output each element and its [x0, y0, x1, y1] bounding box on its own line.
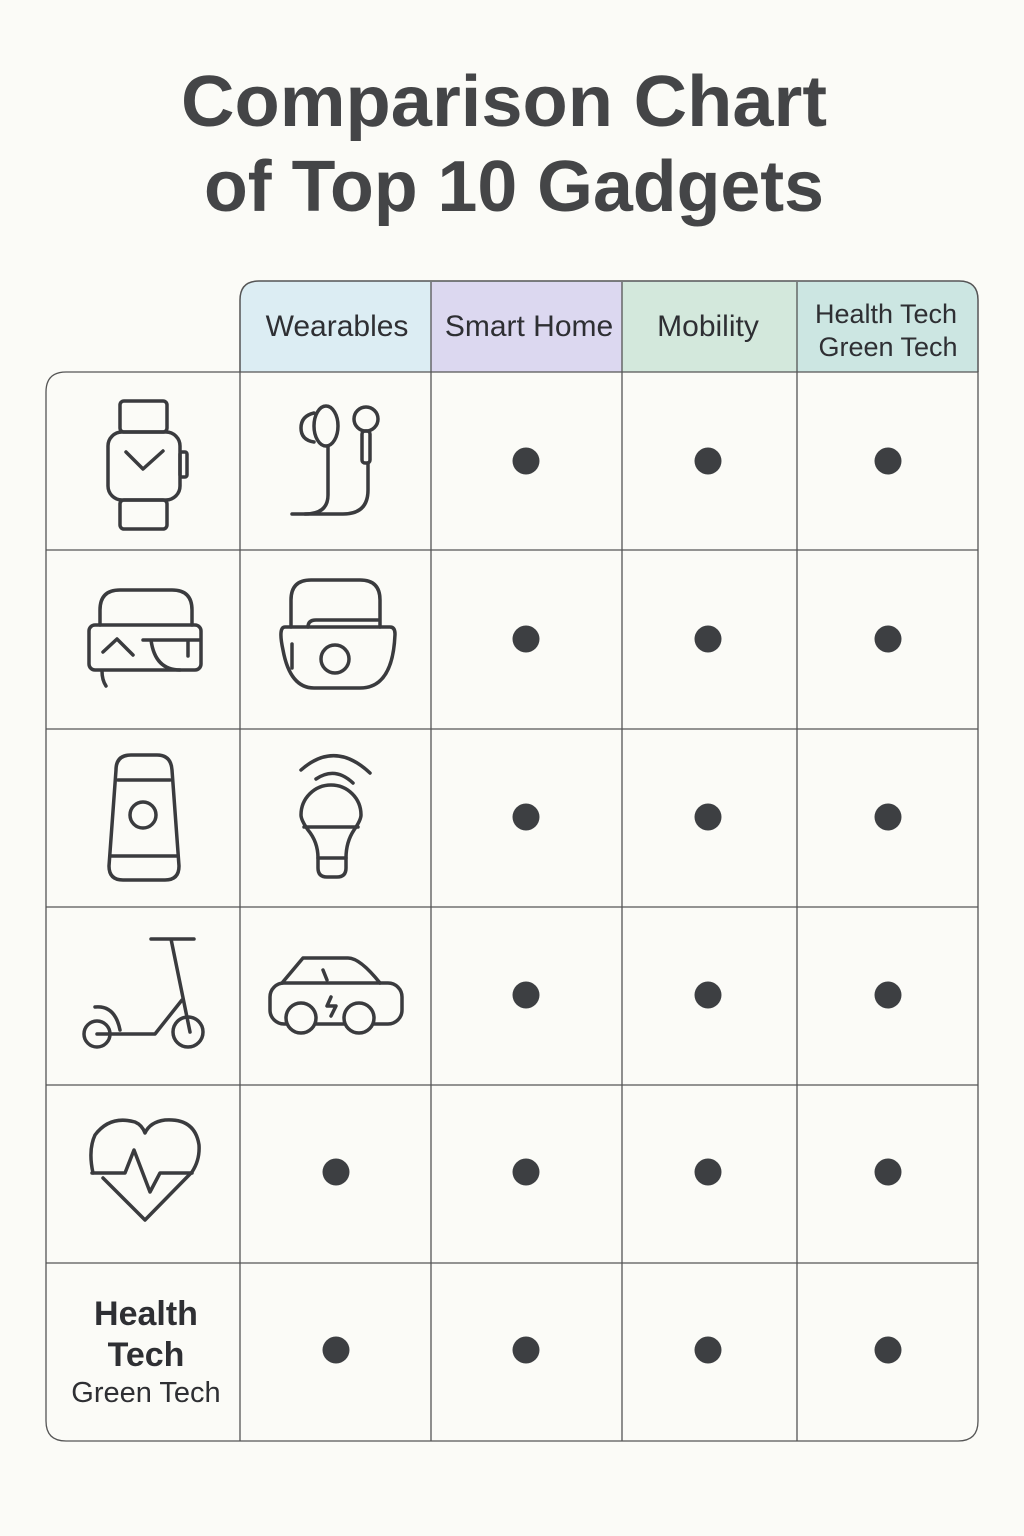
- icon: electric car: [270, 958, 402, 1033]
- dots: [322, 448, 902, 1364]
- icon: smart speaker: [109, 755, 179, 880]
- row label: Health Tech / Green Tech: Tech: [108, 1336, 184, 1374]
- header row: Wearables: [266, 310, 408, 343]
- row label: Health Tech / Green Tech: [71, 1295, 221, 1409]
- icon: heart rate: [91, 1120, 199, 1220]
- icon: earbuds: [292, 406, 378, 514]
- icon: AR glasses: [89, 590, 201, 686]
- title: of Top 10 Gadgets: [204, 147, 824, 227]
- row label: Health Tech / Green Tech: Green Tech: [71, 1377, 221, 1409]
- header row: Health Tech: [815, 299, 957, 329]
- title: Comparison Chart: [181, 62, 827, 142]
- icon: smartwatch: [108, 401, 187, 529]
- row label: Health Tech / Green Tech: Health: [94, 1295, 198, 1333]
- icon: security camera: [281, 580, 395, 688]
- header row: [240, 281, 978, 372]
- title: [181, 62, 827, 227]
- icon: e-scooter: [84, 939, 203, 1047]
- table grid: [46, 282, 978, 1441]
- icon: smart bulb: [301, 756, 370, 877]
- header row: Mobility: [657, 310, 759, 343]
- icons: [84, 401, 402, 1220]
- header row: Smart Home: [445, 310, 613, 343]
- header row: Green Tech: [818, 332, 958, 362]
